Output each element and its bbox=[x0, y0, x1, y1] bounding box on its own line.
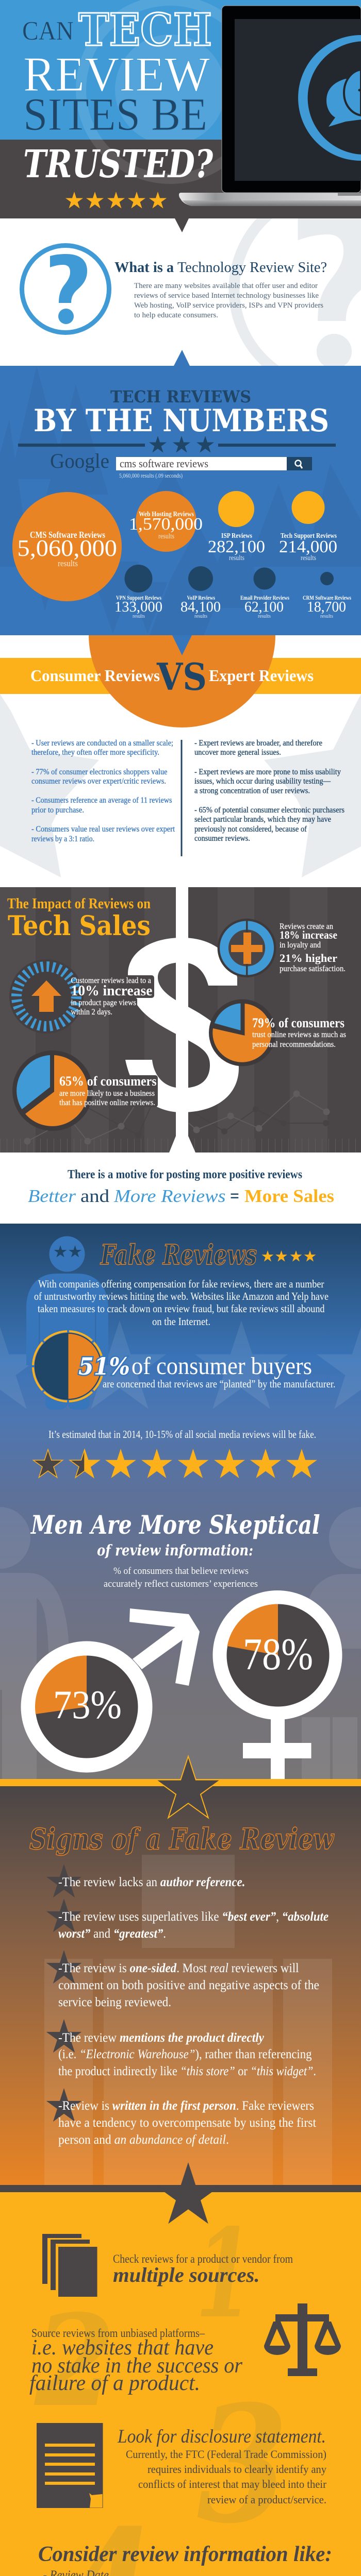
text block: expert review facts: a strong concentration of user reviews. bbox=[194, 786, 310, 795]
bubble: web hosting reviews: Web Hosting Reviews bbox=[139, 511, 194, 518]
stat: 10% increase: 10% increase bbox=[71, 982, 153, 999]
heading: consumer reviews vs expert reviews bbox=[30, 655, 314, 699]
watermark: globe and ring bbox=[76, 0, 222, 184]
divider star bbox=[156, 2162, 221, 2224]
heading: the impact of reviews on tech sales bbox=[7, 896, 151, 942]
heading: what is a technology review site: What is a bbox=[114, 259, 174, 276]
heading: the impact of reviews on tech sales: The Impact of Reviews on bbox=[7, 896, 151, 912]
watermark: faint line chart bbox=[24, 1090, 330, 1145]
bubble: vpn support reviews: VPN Support Reviews bbox=[116, 594, 161, 601]
bubble: cms software reviews: CMS Software Reviews bbox=[30, 530, 105, 540]
text block: expert review facts bbox=[194, 739, 344, 843]
stat: 65% of consumers: that has positive online reviews. bbox=[59, 1098, 155, 1107]
equation: better and more reviews equals more sales: = bbox=[230, 1186, 239, 1206]
equation: better and more reviews equals more sales: and bbox=[80, 1186, 110, 1206]
heading: tech reviews by the numbers: BY THE NUMBERS bbox=[34, 403, 329, 439]
text block: consumer review facts: prior to purchase. bbox=[31, 806, 84, 815]
text block: fake review intro bbox=[34, 1278, 329, 1328]
bubble: voip reviews bbox=[180, 566, 221, 619]
tip 2: unbiased platforms: Source reviews from unbiased platforms– bbox=[31, 2327, 205, 2340]
text: percent of consumers: % of consumers that believe reviews bbox=[113, 1566, 249, 1577]
section: consumer vs expert reviews bbox=[0, 635, 361, 887]
bubble: vpn support reviews: results bbox=[133, 613, 145, 619]
icon: female symbol pie 78%: 78% bbox=[243, 1630, 313, 1680]
tip 1: multiple sources: Check reviews for a product or vendor from bbox=[113, 2252, 293, 2265]
text block: expert review facts: previously not considered, because of bbox=[194, 825, 307, 834]
equation: better and more reviews equals more sales: Better bbox=[28, 1186, 76, 1206]
watermark: gray starbursts bbox=[0, 694, 361, 877]
heading: what is a technology review site: Technology Review Site? bbox=[177, 259, 327, 276]
list: signs of fake reviews: -Review is written in the first person. Fake reviewers bbox=[58, 2099, 314, 2113]
text block: consumer review facts: consumer reviews over expert/critic reviews. bbox=[31, 777, 166, 786]
bubble: email provider reviews bbox=[240, 568, 289, 619]
text: percent of consumers: accurately reflect customers’ experiences bbox=[104, 1579, 258, 1589]
text block: expert review facts: issues, which occur during usability testing— bbox=[194, 777, 331, 786]
stat: 18% increase, 21% higher bbox=[280, 922, 346, 973]
title: can tech review sites be trusted: SITES BE bbox=[23, 89, 207, 140]
list: signs of fake reviews: service being reviewed. bbox=[58, 1995, 171, 2009]
heading: fake reviews: Fake Reviews bbox=[100, 1239, 257, 1271]
text block: expert review facts: - Expert reviews are more prone to miss usability bbox=[194, 768, 341, 776]
icon: laptop with chat bubbles bbox=[179, 6, 361, 206]
text block: consumer review facts: - Consumers value real user reviews over expert bbox=[31, 825, 175, 834]
watermark: faint person figures bbox=[0, 1507, 361, 1779]
tip 3: disclosure statement: conflicts of interest that may bleed into their bbox=[138, 2478, 327, 2490]
heading: tech reviews by the numbers: TECH REVIEWS bbox=[110, 387, 251, 406]
bubble: cms software reviews bbox=[12, 492, 122, 601]
search bar: google cms software reviews: 5,060,000 results (.09 seconds) bbox=[119, 472, 183, 479]
icon: up arrow in dashed ring bbox=[9, 959, 84, 1033]
icon: question mark in circle bbox=[22, 245, 109, 333]
text block: consumer review facts bbox=[31, 739, 175, 843]
icon: male symbol pie 73%: 73% bbox=[53, 1682, 122, 1727]
bubble: web hosting reviews: 1,570,000 bbox=[129, 515, 203, 534]
heading: men are more skeptical: of review information: bbox=[97, 1541, 253, 1559]
stat: 65% of consumers: are more likely to use a business bbox=[59, 1089, 155, 1098]
stat: 51% of consumer buyers: of consumer buyers bbox=[132, 1352, 312, 1380]
stat: 18% increase, 21% higher: purchase satisfaction. bbox=[280, 964, 346, 973]
section: signs of a fake review bbox=[0, 1756, 361, 2185]
tip 2: unbiased platforms bbox=[29, 2327, 243, 2395]
list: signs of fake reviews bbox=[58, 1875, 329, 2147]
watermark: large question mark bbox=[234, 191, 361, 388]
stat: 10% increase: Customer reviews lead to a bbox=[71, 976, 151, 985]
search bar: google cms software reviews: Google bbox=[50, 449, 109, 472]
text block: expert review facts: - 65% of potential consumer electronic purchasers bbox=[194, 806, 344, 815]
heading: consumer reviews vs expert reviews: VS bbox=[156, 655, 207, 699]
bubble: web hosting reviews: results bbox=[158, 533, 174, 540]
faint background blocks bbox=[44, 1855, 332, 2185]
list: signs of fake reviews: -The review uses superlatives like “best ever”, “absolute bbox=[58, 1910, 329, 1924]
heading: tech reviews by the numbers bbox=[18, 387, 336, 453]
text: there is a motive: There is a motive for posting more positive reviews bbox=[68, 1168, 302, 1181]
text block: fake review intro: on the Internet. bbox=[152, 1315, 210, 1328]
list: signs of fake reviews: -The review lacks an author reference. bbox=[58, 1875, 245, 1889]
heading: consumer reviews vs expert reviews: Consumer Reviews bbox=[30, 666, 160, 685]
stat: 79% of consumers: personal recommendations. bbox=[252, 1040, 336, 1049]
text block: consumer review facts: - 77% of consumer electronics shoppers value bbox=[31, 768, 168, 776]
stat: 18% increase, 21% higher: Reviews create an bbox=[280, 922, 333, 931]
bubble: crm software reviews: results bbox=[320, 613, 333, 619]
title: can tech review sites be trusted bbox=[22, 4, 214, 187]
heading: what is a technology review site bbox=[114, 259, 327, 276]
search bar: google cms software reviews: cms software reviews bbox=[120, 457, 208, 470]
tip 3: disclosure statement bbox=[117, 2426, 327, 2506]
bubble: email provider reviews: results bbox=[258, 613, 271, 619]
bubble: tech support reviews: Tech Support Reviews bbox=[281, 532, 337, 540]
list: signs of fake reviews: -The review is one-sided. Most real reviewers will bbox=[58, 1961, 299, 1975]
stat: 79% of consumers bbox=[252, 1015, 346, 1049]
tip 3: disclosure statement: review of a product/service. bbox=[207, 2493, 326, 2506]
pointer from numbers section bbox=[172, 635, 192, 655]
text: percent of consumers bbox=[104, 1566, 258, 1589]
text block: consumer review facts: therefore, they often offer more specificity. bbox=[31, 748, 159, 757]
bubble: web hosting reviews bbox=[129, 491, 203, 552]
bubble: email provider reviews: 62,100 bbox=[244, 599, 284, 615]
bullet stars bbox=[46, 1864, 81, 2122]
section: the impact of reviews on tech sales bbox=[0, 887, 361, 1153]
icon: female symbol pie 78% bbox=[212, 1590, 342, 1779]
section: fake reviews and skepticism bbox=[0, 1224, 361, 1779]
equation: better and more reviews equals more sales: More Sales bbox=[244, 1186, 334, 1206]
title: can tech review sites be trusted: TRUSTED? bbox=[23, 142, 214, 187]
bubble: crm software reviews bbox=[303, 572, 351, 619]
tip 3: disclosure statement: Currently, the FTC (Federal Trade Commission) bbox=[126, 2448, 326, 2461]
bubble: vpn support reviews: 133,000 bbox=[114, 599, 162, 615]
equation: better and more reviews equals more sales bbox=[28, 1186, 334, 1206]
yellow band bbox=[0, 658, 361, 694]
list: signs of fake reviews: comment on both positive and negative aspects of the bbox=[58, 1978, 319, 1992]
bubble: tech support reviews bbox=[279, 491, 337, 562]
stat: 65% of consumers bbox=[59, 1074, 157, 1107]
heading: the impact of reviews on tech sales: Tech Sales bbox=[8, 910, 151, 942]
list: signs of fake reviews: (i.e. “Electronic Warehouse”), rather than referencing bbox=[58, 2047, 312, 2061]
pie chart: 51% bbox=[33, 1331, 103, 1401]
bubble: tech support reviews: 214,000 bbox=[279, 537, 337, 556]
watermark: step numbers bbox=[34, 2201, 288, 2576]
title: can tech review sites be trusted: REVIEW bbox=[23, 47, 210, 101]
watermark: step numbers: 2 bbox=[34, 2287, 115, 2435]
list: signs of fake reviews: have a tendency to overcompensate by using the first bbox=[58, 2116, 316, 2130]
icon: plus in ring bbox=[218, 919, 276, 977]
tip 3: disclosure statement: Look for disclosure statement. bbox=[117, 2426, 326, 2447]
title: can tech review sites be trusted: CAN bbox=[22, 16, 74, 46]
orange vs half circle bbox=[89, 635, 275, 727]
icon: scales bbox=[264, 2303, 341, 2376]
list: signs of fake reviews: -The review mentions the product directly bbox=[58, 2031, 265, 2045]
stat: 10% increase bbox=[71, 976, 153, 1016]
five star rating bbox=[65, 192, 167, 209]
bubble: vpn support reviews bbox=[114, 565, 162, 619]
star row: fake share bbox=[33, 1449, 317, 1478]
stat: 65% of consumers: 65% of consumers bbox=[59, 1074, 157, 1089]
divider star bbox=[156, 1756, 221, 1818]
section: what is a technology review site bbox=[0, 191, 361, 388]
tip 2: unbiased platforms: no stake in the success or bbox=[31, 2354, 243, 2378]
bubble: crm software reviews: 18,700 bbox=[307, 599, 346, 615]
section: how to vet reviews bbox=[0, 2162, 361, 2576]
pointer under hero bbox=[175, 218, 189, 232]
watermark: step numbers: 1 bbox=[195, 2201, 253, 2345]
text block: fake review intro: With companies offering compensation for fake reviews, there are a number bbox=[38, 1278, 324, 1290]
text block: definition: Web hosting, VoIP service providers, ISPs and VPN providers bbox=[134, 301, 323, 310]
text block: definition: to help educate consumers. bbox=[134, 311, 218, 319]
tip 3: disclosure statement: requires individuals to clearly identify any bbox=[147, 2463, 326, 2476]
bubble: tech support reviews: results bbox=[301, 554, 316, 562]
bubble: isp reviews: 282,100 bbox=[208, 537, 265, 556]
bubble: isp reviews bbox=[208, 491, 265, 562]
stat: 18% increase, 21% higher: 18% increase bbox=[280, 928, 337, 941]
text block: definition: There are many websites available that offer user and editor bbox=[134, 282, 318, 290]
tip 4: consider review information bbox=[38, 2543, 332, 2576]
section: motive for positive reviews bbox=[0, 1153, 361, 1224]
bubble: cms software reviews: results bbox=[58, 558, 78, 568]
section: tech reviews by the numbers bbox=[0, 350, 361, 635]
icon: disclosure document bbox=[37, 2423, 103, 2508]
bubble: isp reviews: results bbox=[229, 554, 244, 562]
stat: 18% increase, 21% higher: 21% higher bbox=[280, 952, 337, 964]
bubble: email provider reviews: Email Provider Reviews bbox=[240, 594, 289, 601]
dark text backing over dollar sign bbox=[125, 975, 158, 1107]
watermark: step numbers: 3 bbox=[197, 2370, 288, 2559]
bubble: voip reviews: 84,100 bbox=[180, 599, 221, 615]
four star rating bbox=[262, 1250, 316, 1262]
stat: 18% increase, 21% higher: in loyalty and bbox=[280, 941, 321, 950]
text block: expert review facts: uncover more general issues. bbox=[194, 748, 281, 757]
pie chart: 65% bbox=[12, 1050, 93, 1131]
text block: expert review facts: select particular brands, which they may have bbox=[194, 815, 331, 824]
tip 2: unbiased platforms: failure of a product. bbox=[29, 2371, 200, 2395]
heading: men are more skeptical bbox=[30, 1510, 320, 1559]
section: hero title bbox=[0, 0, 361, 232]
stat: 79% of consumers: trust online reviews as much as bbox=[252, 1030, 346, 1039]
text block: consumer review facts: - User reviews are conducted on a smaller scale; bbox=[31, 739, 173, 748]
bubble: isp reviews: ISP Reviews bbox=[221, 532, 252, 540]
equation: better and more reviews equals more sales: More Reviews bbox=[113, 1186, 226, 1206]
tip 2: unbiased platforms: i.e. websites that have bbox=[31, 2336, 214, 2360]
icon: large dollar sign bbox=[125, 938, 239, 1153]
stat: 51% of consumer buyers: 51% bbox=[78, 1352, 130, 1380]
text block: consumer review facts: - Consumers reference an average of 11 reviews bbox=[31, 796, 172, 805]
stat: 51% of consumer buyers bbox=[78, 1352, 335, 1390]
text block: expert review facts: - Expert reviews are broader, and therefore bbox=[194, 739, 322, 748]
bubble: voip reviews: results bbox=[194, 613, 207, 619]
icon: person with star eyes bbox=[26, 1236, 108, 1410]
icon: stacked pages bbox=[42, 2234, 97, 2297]
text block: consumer review facts: reviews by a 3:1 ratio. bbox=[31, 835, 94, 843]
text block: expert review facts: consumer reviews. bbox=[194, 834, 250, 843]
list: signs of fake reviews: person and an abundance of detail. bbox=[58, 2133, 229, 2147]
stat: 10% increase: in product page views bbox=[71, 998, 136, 1007]
text block: definition bbox=[134, 282, 323, 319]
bubble: voip reviews: VoIP Reviews bbox=[187, 594, 215, 601]
list: signs of fake reviews: worst” and “greatest”. bbox=[58, 1927, 166, 1941]
title: can tech review sites be trusted: TECH bbox=[78, 4, 212, 56]
stat: 79% of consumers: 79% of consumers bbox=[252, 1015, 344, 1030]
watermark: large stars bbox=[0, 1320, 361, 1409]
text block: definition: reviews of service based Internet technology businesses like bbox=[134, 292, 319, 300]
list: signs of fake reviews: the product indirectly like “this store” or “this widget”. bbox=[58, 2064, 316, 2078]
pointer above numbers section bbox=[174, 350, 190, 366]
heading: consumer reviews vs expert reviews: Expert Reviews bbox=[209, 666, 314, 685]
tip 1: multiple sources bbox=[113, 2252, 293, 2286]
icon: male symbol pie 73% bbox=[21, 1608, 200, 1772]
stat: 10% increase: within 2 days. bbox=[71, 1008, 112, 1016]
pie chart: 79% bbox=[209, 999, 276, 1066]
text block: fake review intro: taken measures to crack down on review fraud, but fake reviews still abound bbox=[38, 1302, 325, 1315]
tip 1: multiple sources: multiple sources. bbox=[113, 2263, 260, 2286]
tip 4: consider review information: Consider review information like: bbox=[38, 2543, 332, 2566]
bubble: cms software reviews: 5,060,000 bbox=[18, 535, 117, 561]
search bar: google cms software reviews bbox=[50, 449, 312, 479]
